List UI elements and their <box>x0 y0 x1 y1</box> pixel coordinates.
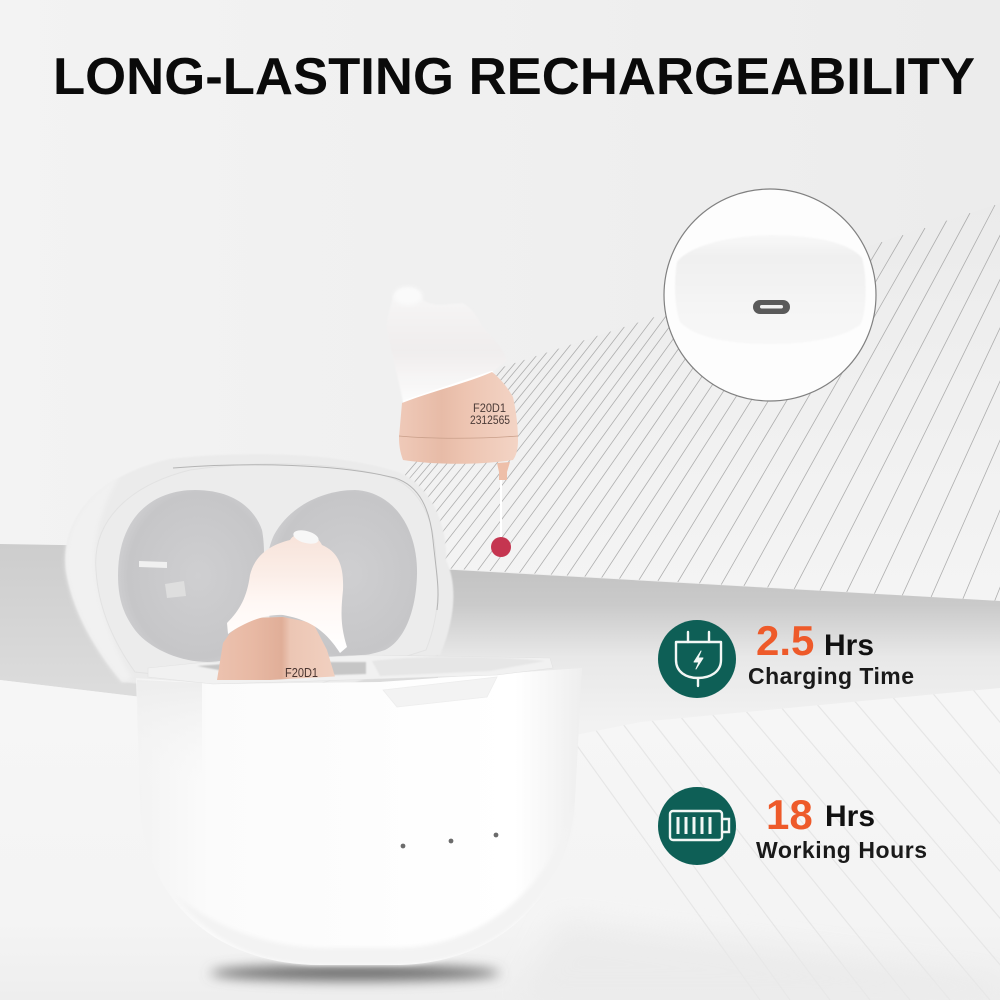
peach body <box>399 372 518 464</box>
title: LONG-LASTING RECHARGEABILITY <box>53 48 975 106</box>
peach body <box>217 617 336 680</box>
stat: charging time <box>658 617 914 698</box>
red pull ball <box>491 537 511 557</box>
grey horizontal band <box>0 544 1000 738</box>
left shaded panel <box>137 680 202 790</box>
icon: battery <box>658 787 736 865</box>
stat: working hours: Hrs <box>825 800 875 833</box>
value: 2.5 <box>756 617 814 664</box>
USB-C port <box>753 300 790 314</box>
indicator lights <box>401 833 498 848</box>
stat: working hours <box>658 787 927 865</box>
hearing aid floating <box>387 287 518 557</box>
floor <box>578 688 1000 924</box>
background scene <box>0 204 1000 1000</box>
value: 18 <box>766 791 813 838</box>
hearing aid in case <box>217 528 347 680</box>
case rim <box>148 655 553 684</box>
label: Charging Time <box>748 663 914 689</box>
right cavity <box>266 490 417 658</box>
charging case lid <box>65 454 453 700</box>
stat: charging time: Hrs <box>824 629 874 662</box>
cavity reflections <box>139 561 186 598</box>
shadow under case <box>210 965 500 981</box>
silicone dome <box>227 534 347 653</box>
pull wire <box>500 480 502 538</box>
model text <box>470 403 510 427</box>
model text: F20D1 <box>473 403 506 415</box>
charging case body <box>136 655 582 965</box>
label: Working Hours <box>756 837 927 863</box>
striped wall <box>405 205 1000 601</box>
silicone dome <box>387 287 507 402</box>
left cavity <box>118 490 264 662</box>
model text: 2312565 <box>470 415 510 427</box>
rim notch <box>383 677 497 707</box>
inset: USB-C charging port <box>664 189 876 401</box>
model text: F20D1 <box>285 666 318 680</box>
icon: plug <box>658 620 736 698</box>
receiver tube <box>497 462 510 480</box>
